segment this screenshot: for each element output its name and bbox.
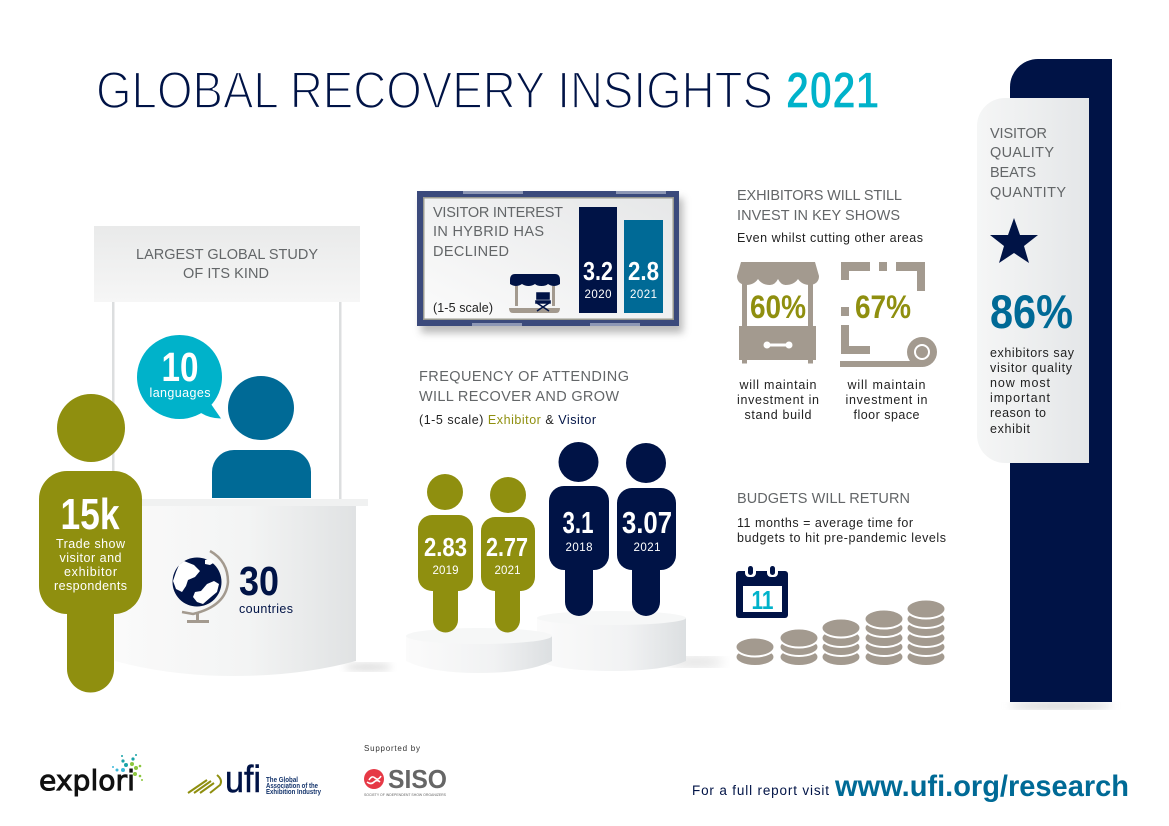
speech bubble: 10 languages [137,335,222,419]
figure: visitor 2021: 2021 [634,542,660,554]
figure: visitor 2021 [617,443,676,616]
heading: budgets will return: 11 months = average time for [737,516,913,530]
heading: frequency of attending: FREQUENCY OF ATTENDING [419,369,629,385]
figure: exhibitor 2021: 2.77 [486,532,528,562]
logo: ufi: ufi [225,759,261,801]
stat: 67% floor space: floor space [854,408,920,422]
logo: explori: explori [39,764,135,797]
olive person: 15k respondents: Trade show [56,537,126,551]
booth sign with heading: OF ITS KIND [183,266,269,282]
olive person: 15k respondents: respondents [54,579,127,593]
icon: floor plan with carpet roll [840,262,937,367]
bar: 2021: 2.8 [628,256,659,286]
logo: ufi [188,759,321,801]
call to action: report link [692,770,1129,803]
olive person: 15k respondents [39,394,142,692]
speech bubble: 10 languages: 10 [162,344,198,390]
bar: 2020 [579,207,617,313]
booth attendant figure [212,376,311,498]
logo: SISO: SISO [388,764,447,794]
stat: 60% stand build: will maintain [738,378,817,392]
bar: 2020: 3.2 [583,256,613,286]
title: 2021 [786,62,879,120]
icon: star [990,218,1038,263]
panel: visitor interest in hybrid: DECLINED [433,244,509,260]
text: exhibitors say: exhibitors say [990,346,1075,360]
icon: calendar 11 [736,566,788,618]
bar: 2021: 2021 [630,289,657,301]
stat: 60% stand build: stand build [744,408,812,422]
figure: exhibitor 2019 [418,474,473,632]
logo: SISO [364,744,447,797]
panel: visitor interest in hybrid: (1-5 scale) [433,301,493,315]
figure: exhibitor 2019: 2019 [432,565,458,577]
text: exhibitors say: important [990,391,1051,405]
icon: globe [172,551,228,623]
bar: 2021 [624,220,663,313]
olive person: 15k respondents: visitor and [60,551,122,565]
panel: visitor interest in hybrid: IN HYBRID HAS [433,224,544,240]
panel: visitor quality beats quantity: QUANTITY [990,185,1066,201]
figure: visitor 2021: 3.07 [622,505,672,540]
title: GLOBAL RECOVERY INSIGHTS [96,62,773,120]
olive person: 15k respondents: 15k [60,490,120,539]
logo: ufi: The Global [266,777,298,784]
text: exhibitors say: exhibit [990,422,1031,436]
stat: 86%: 86% [990,285,1073,338]
stat: 67% floor space [840,262,937,422]
logo: SISO: SOCIETY OF INDEPENDENT SHOW ORGANIZERS [364,793,447,797]
olive person: 15k respondents: exhibitor [64,565,117,579]
stat: 30 countries [239,558,293,616]
booth sign with heading [94,226,360,302]
podium: exhibitor [406,628,552,673]
stat: 30 countries: countries [239,602,293,616]
podium: visitor [537,611,686,671]
figure: exhibitor 2021: 2021 [494,565,520,577]
panel: visitor quality beats quantity: QUALITY [990,145,1054,161]
call to action: report link: For a full report visit [692,783,829,798]
speech bubble: 10 languages: languages [150,386,210,400]
chart: podium figures [406,442,724,673]
panel: largest global study booth [94,226,392,676]
heading: exhibitors will still invest [737,188,923,245]
icon: stand [737,262,819,364]
heading: exhibitors will still invest: EXHIBITORS WILL STILL [737,188,902,204]
text: exhibitors say: visitor quality [990,361,1073,375]
icon: calendar 11: 11 [752,585,774,615]
heading: exhibitors will still invest: Even whilst cutting other areas [737,231,923,245]
stat: 60% stand build: investment in [737,393,819,407]
stat: 67% floor space: investment in [846,393,928,407]
figure: visitor 2018: 2018 [566,542,592,554]
heading: frequency of attending [419,369,629,427]
figure: exhibitor 2021 [481,477,535,632]
heading: frequency of attending: WILL RECOVER AND GROW [419,389,619,405]
text: exhibitors say: now most [990,376,1051,390]
booth sign with heading: LARGEST GLOBAL STUDY [136,247,318,263]
panel: visitor quality beats quantity: VISITOR [990,126,1047,142]
logo: SISO: Supported by [364,744,420,753]
icon: virtual booth [509,274,560,313]
figure: exhibitor 2019: 2.83 [424,532,467,562]
panel: visitor interest in hybrid: VISITOR INTEREST [433,205,563,221]
logo: ufi: Exhibition Industry [266,789,321,796]
heading: frequency of attending: (1-5 scale) Exhibitor & Visitor [419,413,596,427]
heading: exhibitors will still invest: INVEST IN KEY SHOWS [737,208,900,224]
call to action: report link: www.ufi.org/research [834,770,1129,803]
figure: visitor 2018 [549,442,609,616]
logo: ufi: Association of the [266,783,318,790]
stat: 67% floor space: will maintain [846,378,926,392]
stat: 67% floor space: 67% [855,289,911,325]
heading: budgets will return: BUDGETS WILL RETURN [737,491,910,507]
panel: visitor quality beats quantity: BEATS [990,165,1036,181]
text: exhibitors say: reason to [990,406,1046,420]
heading: budgets will return: budgets to hit pre-pandemic levels [737,531,946,545]
panel: visitor interest in hybrid [417,191,683,333]
bar: 2020: 2020 [584,289,612,301]
stat: 60% stand build: 60% [750,289,806,325]
figure: visitor 2018: 3.1 [562,505,594,540]
panel: visitor quality beats quantity [977,59,1113,709]
stat: 30 countries: 30 [239,558,279,604]
counter [115,499,368,676]
text: exhibitors say [990,346,1075,436]
heading: budgets will return [737,491,946,545]
icon: coin stacks [736,600,946,666]
stat: 60% stand build [737,262,819,422]
